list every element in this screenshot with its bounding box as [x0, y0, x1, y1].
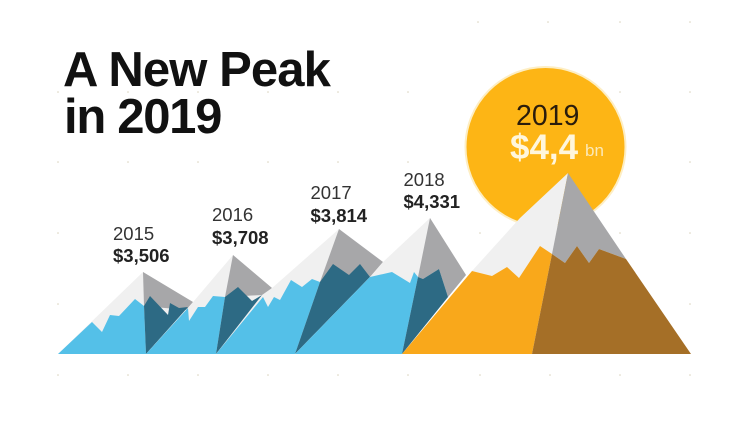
mountain 2016 [146, 255, 272, 354]
sun: 2019 [466, 67, 626, 227]
mountain 2017 [216, 229, 383, 354]
title: A New Peak [63, 43, 332, 97]
label: unit: bn [585, 141, 604, 160]
label: 2018: 2018 [404, 169, 445, 190]
title: in 2019 [64, 90, 221, 144]
label: 2016 [212, 204, 269, 248]
mountain 2015 [58, 272, 193, 354]
label: 2015: 2015 [113, 223, 154, 244]
mountain 2018 [295, 218, 466, 354]
label: 2018 [404, 169, 460, 212]
label: 2017: $3,814 [310, 205, 368, 226]
label: 2015: $3,506 [113, 245, 170, 266]
label: 2016: 2016 [212, 204, 253, 225]
label: 2015 [113, 223, 170, 266]
label: 2019 value: $4,4 [510, 128, 579, 167]
label: 2017: 2017 [310, 182, 352, 203]
title [63, 43, 332, 144]
label: 2019 year: 2019 [516, 100, 579, 132]
mountain 2019 [402, 173, 691, 354]
label: 2016: $3,708 [212, 227, 269, 248]
label: 2017 [310, 182, 368, 226]
label: 2018: $4,331 [404, 191, 460, 212]
